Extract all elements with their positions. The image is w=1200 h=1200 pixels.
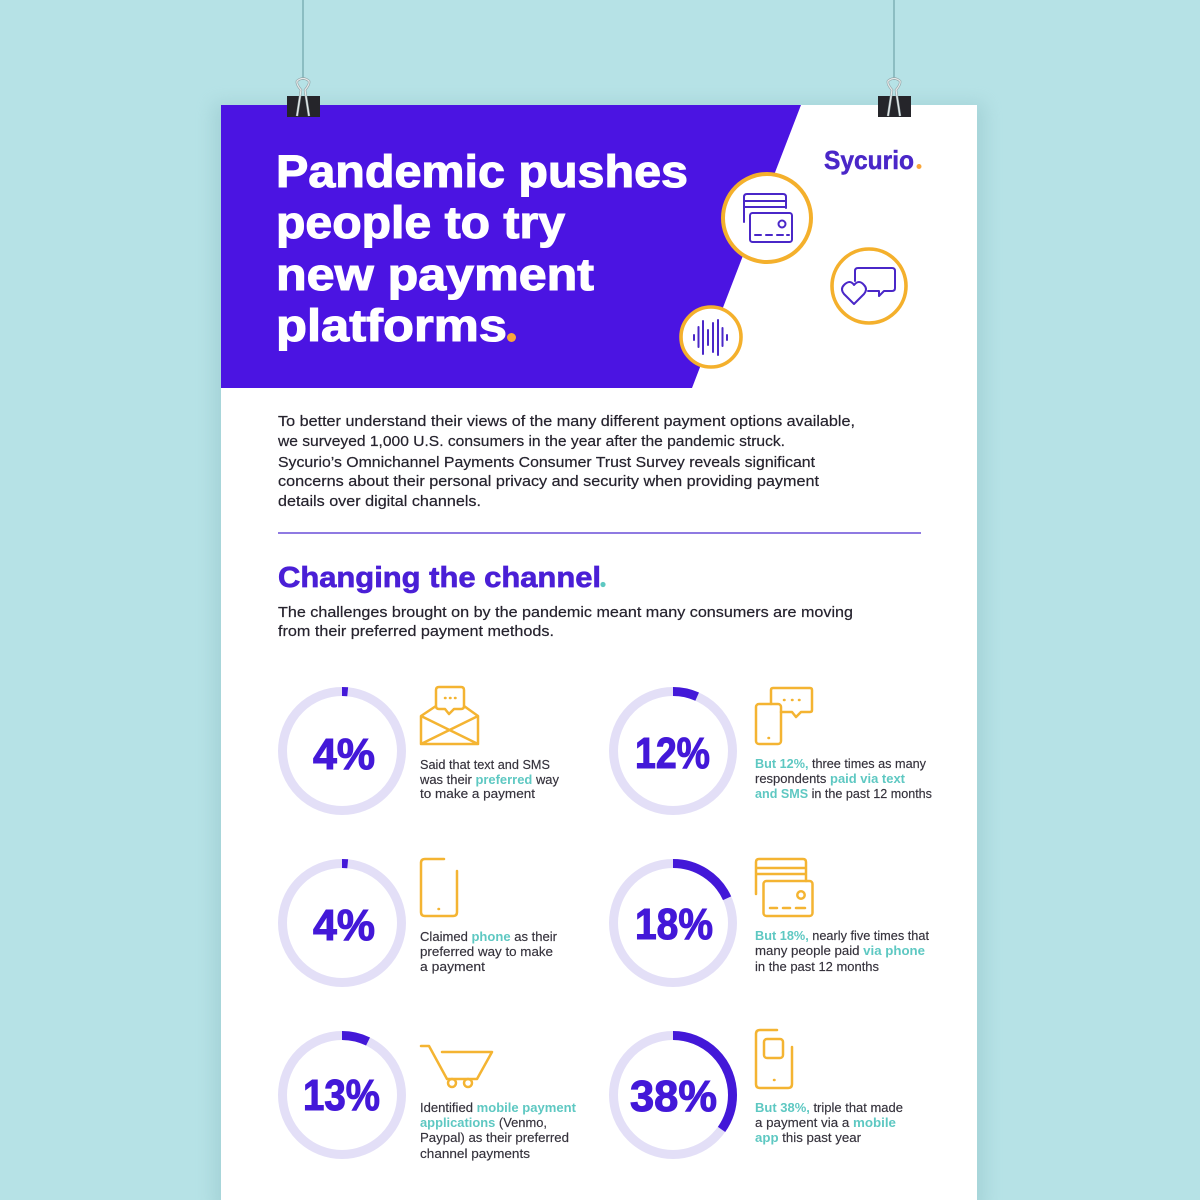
caption: phone preferred: preferred way to make xyxy=(420,945,553,959)
donut: 4% preferred phone: 4% xyxy=(313,901,375,950)
intro paragraph: Sycurio’s Omnichannel Payments Consumer Trust Survey reveals significant xyxy=(278,455,815,471)
section heading: Changing the channel xyxy=(278,562,601,594)
icon: heart and chat badge xyxy=(832,249,906,323)
caption: phone paid: in the past 12 months xyxy=(755,960,879,974)
icon: cards xyxy=(756,859,812,916)
intro paragraph: concerns about their personal privacy and security when providing payment xyxy=(278,474,819,490)
title xyxy=(276,146,688,351)
donut: 38% mobile app: 38% xyxy=(630,1072,717,1121)
donut: 38% mobile app xyxy=(614,1036,732,1154)
caption: text preferred: Said that text and SMS xyxy=(420,758,550,772)
caption: phone preferred: Claimed phone as their xyxy=(420,930,557,944)
caption: text preferred: to make a payment xyxy=(420,787,536,801)
caption: phone paid: many people paid via phone xyxy=(755,944,925,958)
caption: mobile preferred: Identified mobile payment xyxy=(420,1101,577,1115)
donut: 4% preferred phone xyxy=(282,864,402,982)
donut: 4% preferred text: 4% xyxy=(313,730,375,779)
donut: 18% paid via phone xyxy=(614,864,732,982)
caption: text paid: But 12%, three times as many xyxy=(755,757,927,771)
intro paragraph xyxy=(277,414,855,510)
title: people to try xyxy=(276,197,565,248)
caption: mobile preferred: channel payments xyxy=(420,1147,530,1161)
caption: phone paid: But 18%, nearly five times that xyxy=(755,929,929,943)
caption: phone preferred xyxy=(420,930,557,974)
hanging clip left xyxy=(287,0,320,117)
icon: phone xyxy=(421,859,457,916)
caption: text paid xyxy=(755,757,932,801)
section description xyxy=(278,605,853,640)
icon: payment cards badge xyxy=(723,174,811,262)
icon: sound wave badge xyxy=(681,307,741,367)
caption: mobile preferred xyxy=(420,1101,577,1161)
poster sheet xyxy=(221,105,977,1200)
header banner xyxy=(221,105,801,388)
intro paragraph: we surveyed 1,000 U.S. consumers in the year after the pandemic struck. xyxy=(277,434,785,450)
donut: 13% preferred mobile xyxy=(282,1036,402,1154)
caption: mobile preferred: applications (Venmo, xyxy=(420,1116,547,1130)
intro paragraph: details over digital channels. xyxy=(278,494,481,510)
caption: mobile app paid: But 38%, triple that made xyxy=(755,1101,903,1115)
caption: mobile app paid: a payment via a mobile xyxy=(755,1116,896,1130)
caption: phone preferred: a payment xyxy=(420,960,486,974)
caption: text preferred: was their preferred way xyxy=(419,773,560,787)
title: Pandemic pushes xyxy=(276,146,688,197)
caption: text paid: and SMS in the past 12 months xyxy=(755,787,932,801)
icon: phone and chat xyxy=(756,688,812,744)
hanging clip right xyxy=(878,0,911,117)
caption: text paid: respondents paid via text xyxy=(755,772,906,786)
intro paragraph: To better understand their views of the many different payment options available, xyxy=(278,414,855,430)
caption: phone paid xyxy=(755,929,929,974)
icon: shopping cart xyxy=(421,1046,492,1087)
donut: 12% paid via text xyxy=(614,692,732,810)
icon: envelope xyxy=(421,687,478,744)
donut: 13% preferred mobile: 13% xyxy=(303,1071,380,1120)
donut: 4% preferred text xyxy=(282,692,402,810)
title: new payment xyxy=(276,249,594,300)
poster shadow xyxy=(213,103,985,1200)
logo: Sycurio xyxy=(824,145,914,175)
section description: from their preferred payment methods. xyxy=(278,624,554,640)
caption: mobile app paid xyxy=(755,1101,903,1145)
caption: text preferred xyxy=(419,758,560,801)
donut: 12% paid via text: 12% xyxy=(635,729,710,778)
caption: mobile app paid: app this past year xyxy=(755,1131,861,1145)
caption: mobile preferred: Paypal) as their preferred xyxy=(420,1131,569,1145)
section description: The challenges brought on by the pandemic meant many consumers are moving xyxy=(278,605,853,621)
donut: 18% paid via phone: 18% xyxy=(635,900,713,949)
title: platforms xyxy=(276,300,507,351)
icon: mobile app xyxy=(756,1030,792,1088)
